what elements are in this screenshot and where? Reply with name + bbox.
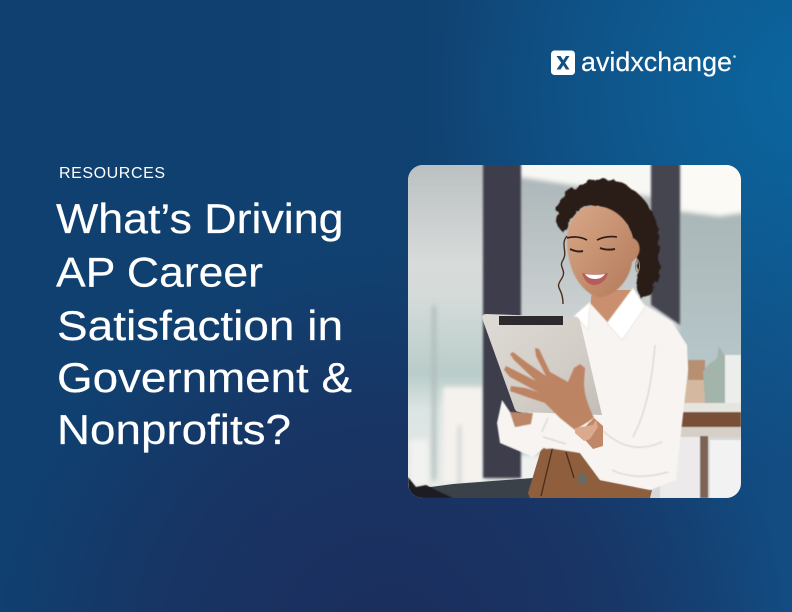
photo: desk at bottom left (408, 478, 533, 498)
woman: face (567, 206, 640, 297)
woman: curly hair tendril (559, 236, 567, 304)
woman: left sleeve (497, 400, 545, 457)
logo: avidxchange (551, 47, 736, 77)
photo: shelf and plant at right (660, 346, 741, 498)
eyebrow: RESOURCES: RESOURCES (59, 165, 165, 182)
icon: logo mark (551, 50, 575, 75)
woman: hair (557, 179, 660, 298)
title (56, 195, 352, 453)
woman: hand (504, 348, 594, 430)
woman: earring (636, 260, 640, 272)
title: Nonprofits? (57, 406, 291, 453)
woman: eyes, brows and smile (567, 237, 617, 285)
woman: blouse under tablet (528, 410, 594, 449)
title: Satisfaction in (57, 302, 343, 349)
woman: neck (590, 290, 632, 322)
title: AP Career (56, 248, 263, 296)
woman: skirt (528, 443, 652, 498)
woman: blouse folds (540, 345, 668, 476)
woman: collar (575, 288, 645, 340)
woman: wrist and watch (575, 418, 603, 449)
photo background: office (408, 165, 741, 498)
photo: dark pillars (483, 160, 680, 478)
title: Government & (57, 354, 352, 401)
title: What’s Driving (56, 195, 344, 242)
tablet (482, 314, 602, 415)
logo registered mark (733, 55, 736, 58)
woman: blouse (497, 288, 688, 490)
logo wordmark: avidxchange (581, 47, 732, 77)
photo: woman using a tablet in an office (408, 165, 741, 498)
